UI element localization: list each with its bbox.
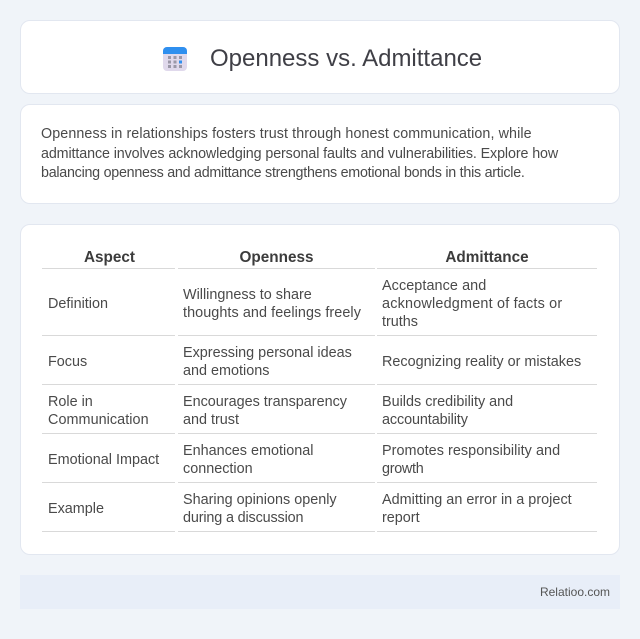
row: emotional impact: Promotes responsibility and: [382, 443, 560, 459]
row: emotional impact: connection: [183, 461, 253, 477]
footer credit: Relatioo.com: [540, 585, 610, 599]
row: focus: Expressing personal ideas: [183, 345, 352, 361]
row: role in communication: and trust: [183, 412, 239, 428]
row: role in communication: Encourages transparency: [183, 394, 347, 410]
row: emotional impact: [48, 443, 560, 477]
row: emotional impact: Enhances emotional: [183, 443, 313, 459]
row: example: [48, 492, 572, 526]
row: example: report: [382, 510, 420, 526]
intro text: [41, 126, 558, 181]
title: Openness vs. Admittance: [210, 45, 482, 72]
intro text: Openness in relationships fosters trust through honest communication, while: [41, 126, 532, 142]
row: definition: thoughts and feelings freely: [183, 305, 361, 321]
row: focus: [48, 345, 581, 379]
table column headings: Admittance: [445, 249, 529, 266]
table column headings: [84, 249, 529, 266]
icon: calendar: [163, 47, 187, 71]
row: role in communication: Role in: [48, 394, 93, 410]
row: focus: and emotions: [183, 363, 269, 379]
row: example: Sharing opinions openly: [183, 492, 337, 508]
table rules: [42, 268, 597, 532]
row: focus: Focus: [48, 354, 87, 370]
row: definition: [48, 278, 562, 330]
footer bar: [20, 575, 620, 609]
row: definition: Definition: [48, 296, 108, 312]
row: definition: Acceptance and: [382, 278, 486, 294]
row: example: Example: [48, 501, 104, 517]
panel: title card: [20, 20, 620, 94]
intro text: balancing openness and admittance strengthens emotional bonds in this article.: [41, 165, 525, 181]
intro text: admittance involves acknowledging personal faults and vulnerabilities. Explore how: [41, 146, 558, 162]
row: example: Admitting an error in a project: [382, 492, 572, 508]
row: role in communication: accountability: [382, 412, 468, 428]
table column headings: Openness: [240, 249, 313, 266]
row: focus: Recognizing reality or mistakes: [382, 354, 581, 370]
table column headings: Aspect: [84, 249, 135, 266]
row: definition: Willingness to share: [183, 287, 312, 303]
row: role in communication: Communication: [48, 412, 149, 428]
panel: comparison table: [20, 224, 620, 555]
row: role in communication: Builds credibility and: [382, 394, 513, 410]
row: definition: truths: [382, 314, 418, 330]
row: emotional impact: growth: [382, 461, 423, 477]
row: emotional impact: Emotional Impact: [48, 452, 159, 468]
panel: introduction: [20, 104, 620, 204]
row: example: during a discussion: [183, 510, 303, 526]
row: role in communication: [48, 394, 513, 428]
row: definition: acknowledgment of facts or: [382, 296, 562, 312]
